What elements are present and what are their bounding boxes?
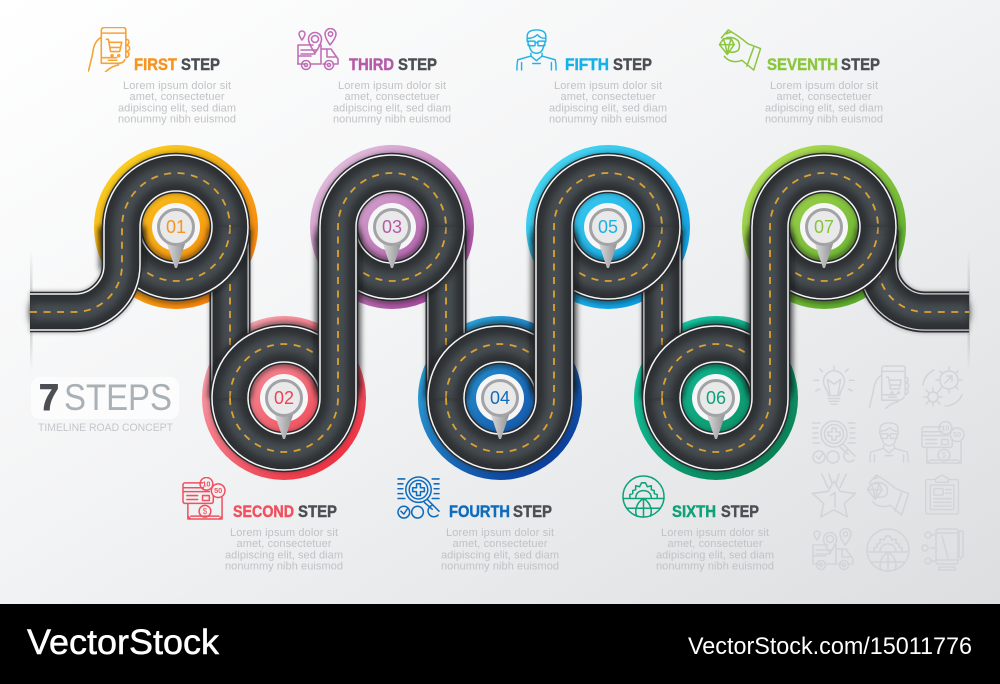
icon: phone in hand <box>89 28 130 72</box>
body text: amet, consectetuer <box>130 91 225 103</box>
pin 02: 02 <box>274 388 294 408</box>
body text <box>225 527 343 572</box>
pin 05 <box>584 203 632 268</box>
grid icon: light bulb <box>814 366 854 404</box>
body text: amet, consectetuer <box>452 538 548 550</box>
body text: nonummy nibh euismod <box>225 560 343 572</box>
heading: sixth step: SIXTH <box>672 502 716 521</box>
pin 06 <box>692 374 740 439</box>
disc 03 <box>310 145 474 309</box>
heading: fourth step <box>449 502 552 521</box>
badge number and word: 7 <box>39 377 59 418</box>
grid icon: star <box>813 474 855 517</box>
heading: sixth step <box>672 502 759 521</box>
body text <box>549 80 667 126</box>
step 5 block <box>517 30 667 126</box>
body text: amet, consectetuer <box>236 538 332 550</box>
heading: third step: THIRD <box>349 55 394 74</box>
grid icon: money <box>922 421 964 463</box>
pin 04: 04 <box>490 388 510 408</box>
body text: Lorem ipsum dolor sit <box>123 80 231 92</box>
body text: adipiscing elit, sed diam <box>656 550 774 562</box>
body text: nonummy nibh euismod <box>441 560 559 572</box>
footer brand: VectorStock <box>27 623 220 662</box>
icon: magnifier and checks <box>398 477 439 518</box>
step 6 block <box>623 476 774 572</box>
body text: nonummy nibh euismod <box>333 114 451 126</box>
heading: second step: SECOND <box>233 502 294 521</box>
pin 05: 05 <box>598 217 618 237</box>
grid icon: person <box>870 423 908 462</box>
heading: first step <box>134 55 220 74</box>
grid icon: tablet <box>922 529 963 570</box>
body text: amet, consectetuer <box>668 538 763 550</box>
pin 02 <box>260 374 308 439</box>
body text: adipiscing elit, sed diam <box>225 550 343 562</box>
subtitle: TIMELINE ROAD CONCEPT <box>38 422 173 434</box>
icon: hand holding diamond <box>719 30 761 70</box>
disc 02 <box>202 316 366 480</box>
body text: Lorem ipsum dolor sit <box>554 80 662 92</box>
grid icon: gears <box>923 367 962 406</box>
body text: Lorem ipsum dolor sit <box>770 80 878 92</box>
body text: amet, consectetuer <box>560 91 656 103</box>
heading: sixth step: STEP <box>721 502 759 521</box>
icon: person with glasses <box>517 30 556 70</box>
body text <box>333 80 451 126</box>
body text: amet, consectetuer <box>776 91 872 103</box>
heading: third step <box>349 55 437 74</box>
pin 03: 03 <box>382 217 402 237</box>
grid icon: hand <box>867 475 909 515</box>
step 4 block <box>398 477 559 572</box>
ring tail sections <box>122 227 878 398</box>
body text: nonummy nibh euismod <box>118 114 236 126</box>
heading: first step: FIRST <box>134 55 178 74</box>
body text: adipiscing elit, sed diam <box>765 102 883 114</box>
heading: second step: STEP <box>298 502 337 521</box>
icon: money and card <box>183 477 225 519</box>
coloured discs behind the road <box>94 145 906 480</box>
grid icon: globe <box>867 529 909 571</box>
title badge: 7 steps <box>31 377 179 434</box>
body text: nonummy nibh euismod <box>765 114 883 126</box>
heading: first step: STEP <box>181 55 220 74</box>
body text <box>656 527 774 572</box>
badge number and word: STEPS <box>64 377 172 418</box>
road end shadow: left <box>30 250 32 372</box>
heading: second step <box>233 502 337 521</box>
shadow cast by the upper sections <box>122 227 770 390</box>
grid icon: phone <box>869 366 909 408</box>
body text: amet, consectetuer <box>344 91 440 103</box>
pin 04 <box>476 374 524 439</box>
body text: Lorem ipsum dolor sit <box>230 527 338 539</box>
road sections passing underneath <box>230 230 969 398</box>
body text: adipiscing elit, sed diam <box>549 102 667 114</box>
footer background <box>0 604 1000 684</box>
shadow cast on the lower sections <box>122 227 878 398</box>
footer url: VectorStock.com/15011776 <box>688 633 972 660</box>
footer bar <box>0 604 1000 684</box>
body text <box>765 80 883 126</box>
pin 03 <box>368 203 416 268</box>
disc 06 <box>634 316 798 480</box>
pin 07 <box>800 203 848 268</box>
ground shadow under the road <box>30 173 969 452</box>
grid icon: clipboard <box>926 475 958 514</box>
heading: fifth step: STEP <box>613 55 652 74</box>
pin 07: 07 <box>814 217 834 237</box>
heading: seventh step: SEVENTH <box>767 55 838 74</box>
disc 04 <box>418 316 582 480</box>
grid icon: magnifier <box>813 421 855 463</box>
icon: delivery truck with pins <box>297 28 338 70</box>
heading: fifth step: FIFTH <box>565 55 609 74</box>
body text: adipiscing elit, sed diam <box>441 550 559 562</box>
body text: Lorem ipsum dolor sit <box>446 527 554 539</box>
heading: fifth step <box>565 55 652 74</box>
heading: fourth step: STEP <box>513 502 552 521</box>
heading: third step: STEP <box>398 55 437 74</box>
heading: fourth step: FOURTH <box>449 502 510 521</box>
winding road <box>30 173 969 452</box>
body text: Lorem ipsum dolor sit <box>338 80 446 92</box>
step 7 block <box>719 30 883 126</box>
badge background <box>31 377 179 419</box>
body text: adipiscing elit, sed diam <box>333 102 451 114</box>
body text <box>118 80 236 126</box>
icon: globe with gear <box>623 476 664 517</box>
pin 01: 01 <box>166 217 186 237</box>
step 1 block <box>89 28 236 125</box>
body text: nonummy nibh euismod <box>549 114 667 126</box>
disc 05 <box>526 145 690 309</box>
body text: adipiscing elit, sed diam <box>118 102 236 114</box>
step markers <box>152 203 848 439</box>
disc 07 <box>742 145 906 309</box>
grid icon: truck <box>812 528 853 570</box>
body text <box>441 527 559 572</box>
pin 06: 06 <box>706 388 726 408</box>
main road sections <box>30 173 878 452</box>
step 3 block <box>297 28 451 126</box>
disc 01 <box>94 145 258 309</box>
road end shadow: right <box>968 250 970 372</box>
body text: Lorem ipsum dolor sit <box>661 527 769 539</box>
faded icon grid <box>812 366 964 571</box>
pin 01 <box>152 203 200 268</box>
heading: seventh step: STEP <box>841 55 880 74</box>
body text: nonummy nibh euismod <box>656 560 774 572</box>
step 2 block <box>183 477 343 572</box>
